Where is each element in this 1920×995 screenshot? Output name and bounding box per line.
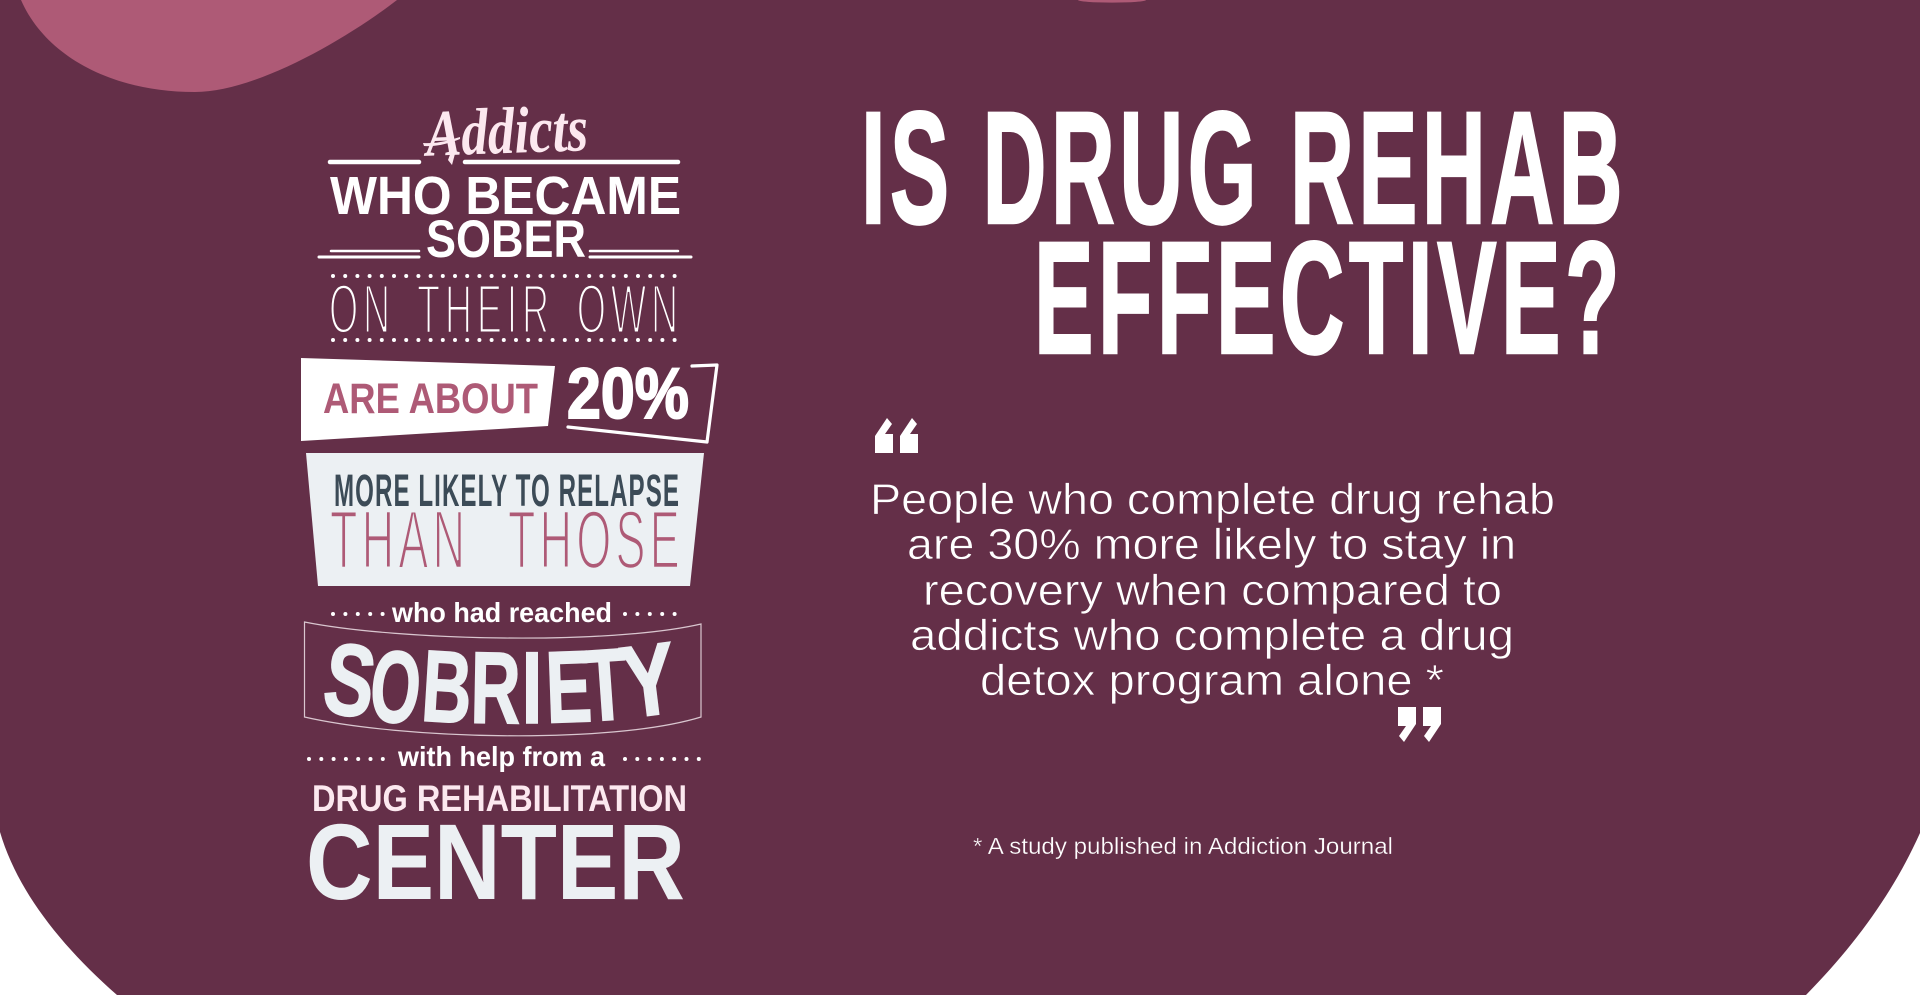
quote text: addicts who complete a drug [910,611,1514,660]
text: on their own: ON THEIR OWN [329,270,683,348]
dotted rule below on their own [333,338,675,342]
panel: statistic typography [301,92,717,922]
text: who had reached: who had reached [391,597,612,628]
rules under Addicts [330,160,678,164]
bottom left white corner [0,832,117,995]
quote text [870,475,1555,705]
top centre pink sliver [1078,0,1146,3]
quote text: recovery when compared to [923,566,1502,615]
icon: opening quotation mark [875,418,918,453]
sobriety arched word: E [544,629,594,745]
quote text: People who complete drug rehab [870,475,1555,524]
sobriety arched word: B [419,629,476,745]
text: sober: SOBER [426,210,586,269]
sobriety arched word: I [522,631,542,745]
white banner [301,358,555,441]
text: drug rehabilitation: DRUG REHABILITATION [312,778,687,819]
heading: Addicts: Addicts [421,92,589,171]
bottom right white corner [1806,833,1920,995]
sobriety arched word: S [317,620,383,740]
text: more likely to relapse: MORE LIKELY TO RELAPSE [334,465,680,516]
sobriety arched word [317,620,682,746]
text: 20 percent: 20% [567,355,689,434]
sobriety arched word: T [580,627,631,743]
dotted accents beside who had reached [333,612,675,616]
title [861,78,1627,387]
text: than those: THAN THOSE [330,493,684,586]
text: center: CENTER [306,801,685,922]
sobriety arched word: R [470,631,522,745]
double rules beside sober [319,251,691,257]
icon: closing quotation mark [1398,707,1441,742]
dotted accents beside with help from a [309,757,700,761]
sobriety arched word: Y [615,620,682,740]
top left pink blob [21,0,397,92]
footnote: * A study published in Addiction Journal [973,833,1393,859]
text: are about: ARE ABOUT [323,375,538,423]
sobriety arched word: O [365,628,426,746]
dotted rule above on their own [333,274,675,278]
quote text: are 30% more likely to stay in [907,520,1516,569]
sobriety frame [304,622,701,736]
quote text: detox program alone * [980,656,1444,705]
bracket around 20 percent [568,365,717,442]
text: with help from a: with help from a [397,741,606,772]
text: who became: WHO BECAME [330,166,681,226]
light banner [306,453,704,586]
